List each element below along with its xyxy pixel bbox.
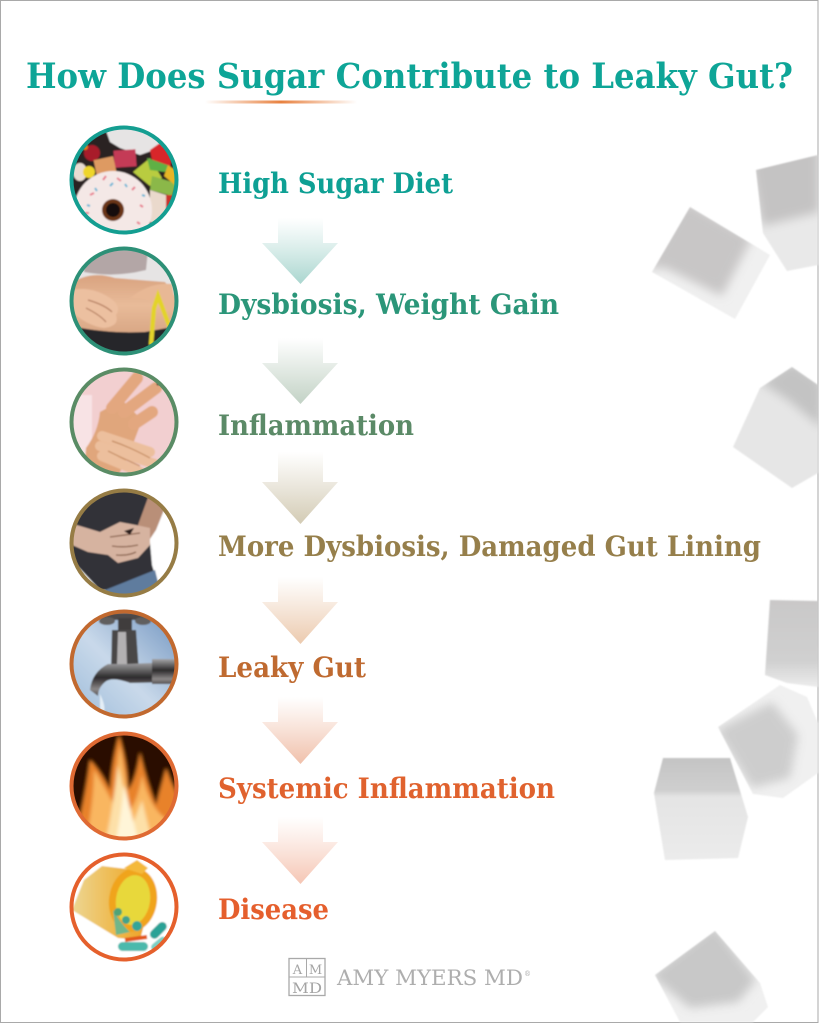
step 7: icon pill bottle xyxy=(70,853,178,961)
step 2: icon waist and measuring tape xyxy=(70,247,178,358)
step 3 label: Inflammation xyxy=(218,409,414,442)
step 3: icon hands xyxy=(70,368,178,476)
step 6: icon flames xyxy=(70,732,180,840)
step 7 label: Disease xyxy=(218,893,329,926)
arrow 4 xyxy=(262,577,338,644)
arrow 1 xyxy=(262,218,338,284)
sugar cube 4 xyxy=(765,600,818,687)
sugar cube 6 xyxy=(654,758,748,860)
sugar cube 5 xyxy=(715,680,819,800)
step 2 label: Dysbiosis, Weight Gain xyxy=(218,288,559,321)
logo mark xyxy=(289,958,325,997)
sugar cube 7 xyxy=(655,931,768,1023)
step 4: icon stomach pain xyxy=(70,489,178,597)
arrow 6 xyxy=(262,817,338,884)
logo mark: A xyxy=(292,963,303,978)
sugar cubes xyxy=(640,145,819,1023)
logo mark: MD xyxy=(292,981,322,997)
step 1 label: High Sugar Diet xyxy=(218,167,453,200)
step 5 label: Leaky Gut xyxy=(218,651,366,684)
sugar cube 2 xyxy=(756,154,818,271)
registered mark: ® xyxy=(524,970,531,978)
title underline xyxy=(205,100,357,104)
sugar cube 1 xyxy=(652,206,770,318)
logo mark: M xyxy=(309,963,322,978)
arrow 2 xyxy=(262,338,338,404)
step 5: icon dripping tap xyxy=(70,610,178,718)
step 1: icon candy and donut xyxy=(70,126,178,234)
arrow 3 xyxy=(262,452,338,524)
step 4 label: More Dysbiosis, Damaged Gut Lining xyxy=(218,530,761,563)
step 6 label: Systemic Inflammation xyxy=(218,772,555,805)
logo wordmark: AMY MYERS MD xyxy=(336,966,523,990)
arrow 5 xyxy=(262,697,338,764)
sugar cube 3 xyxy=(733,366,818,488)
